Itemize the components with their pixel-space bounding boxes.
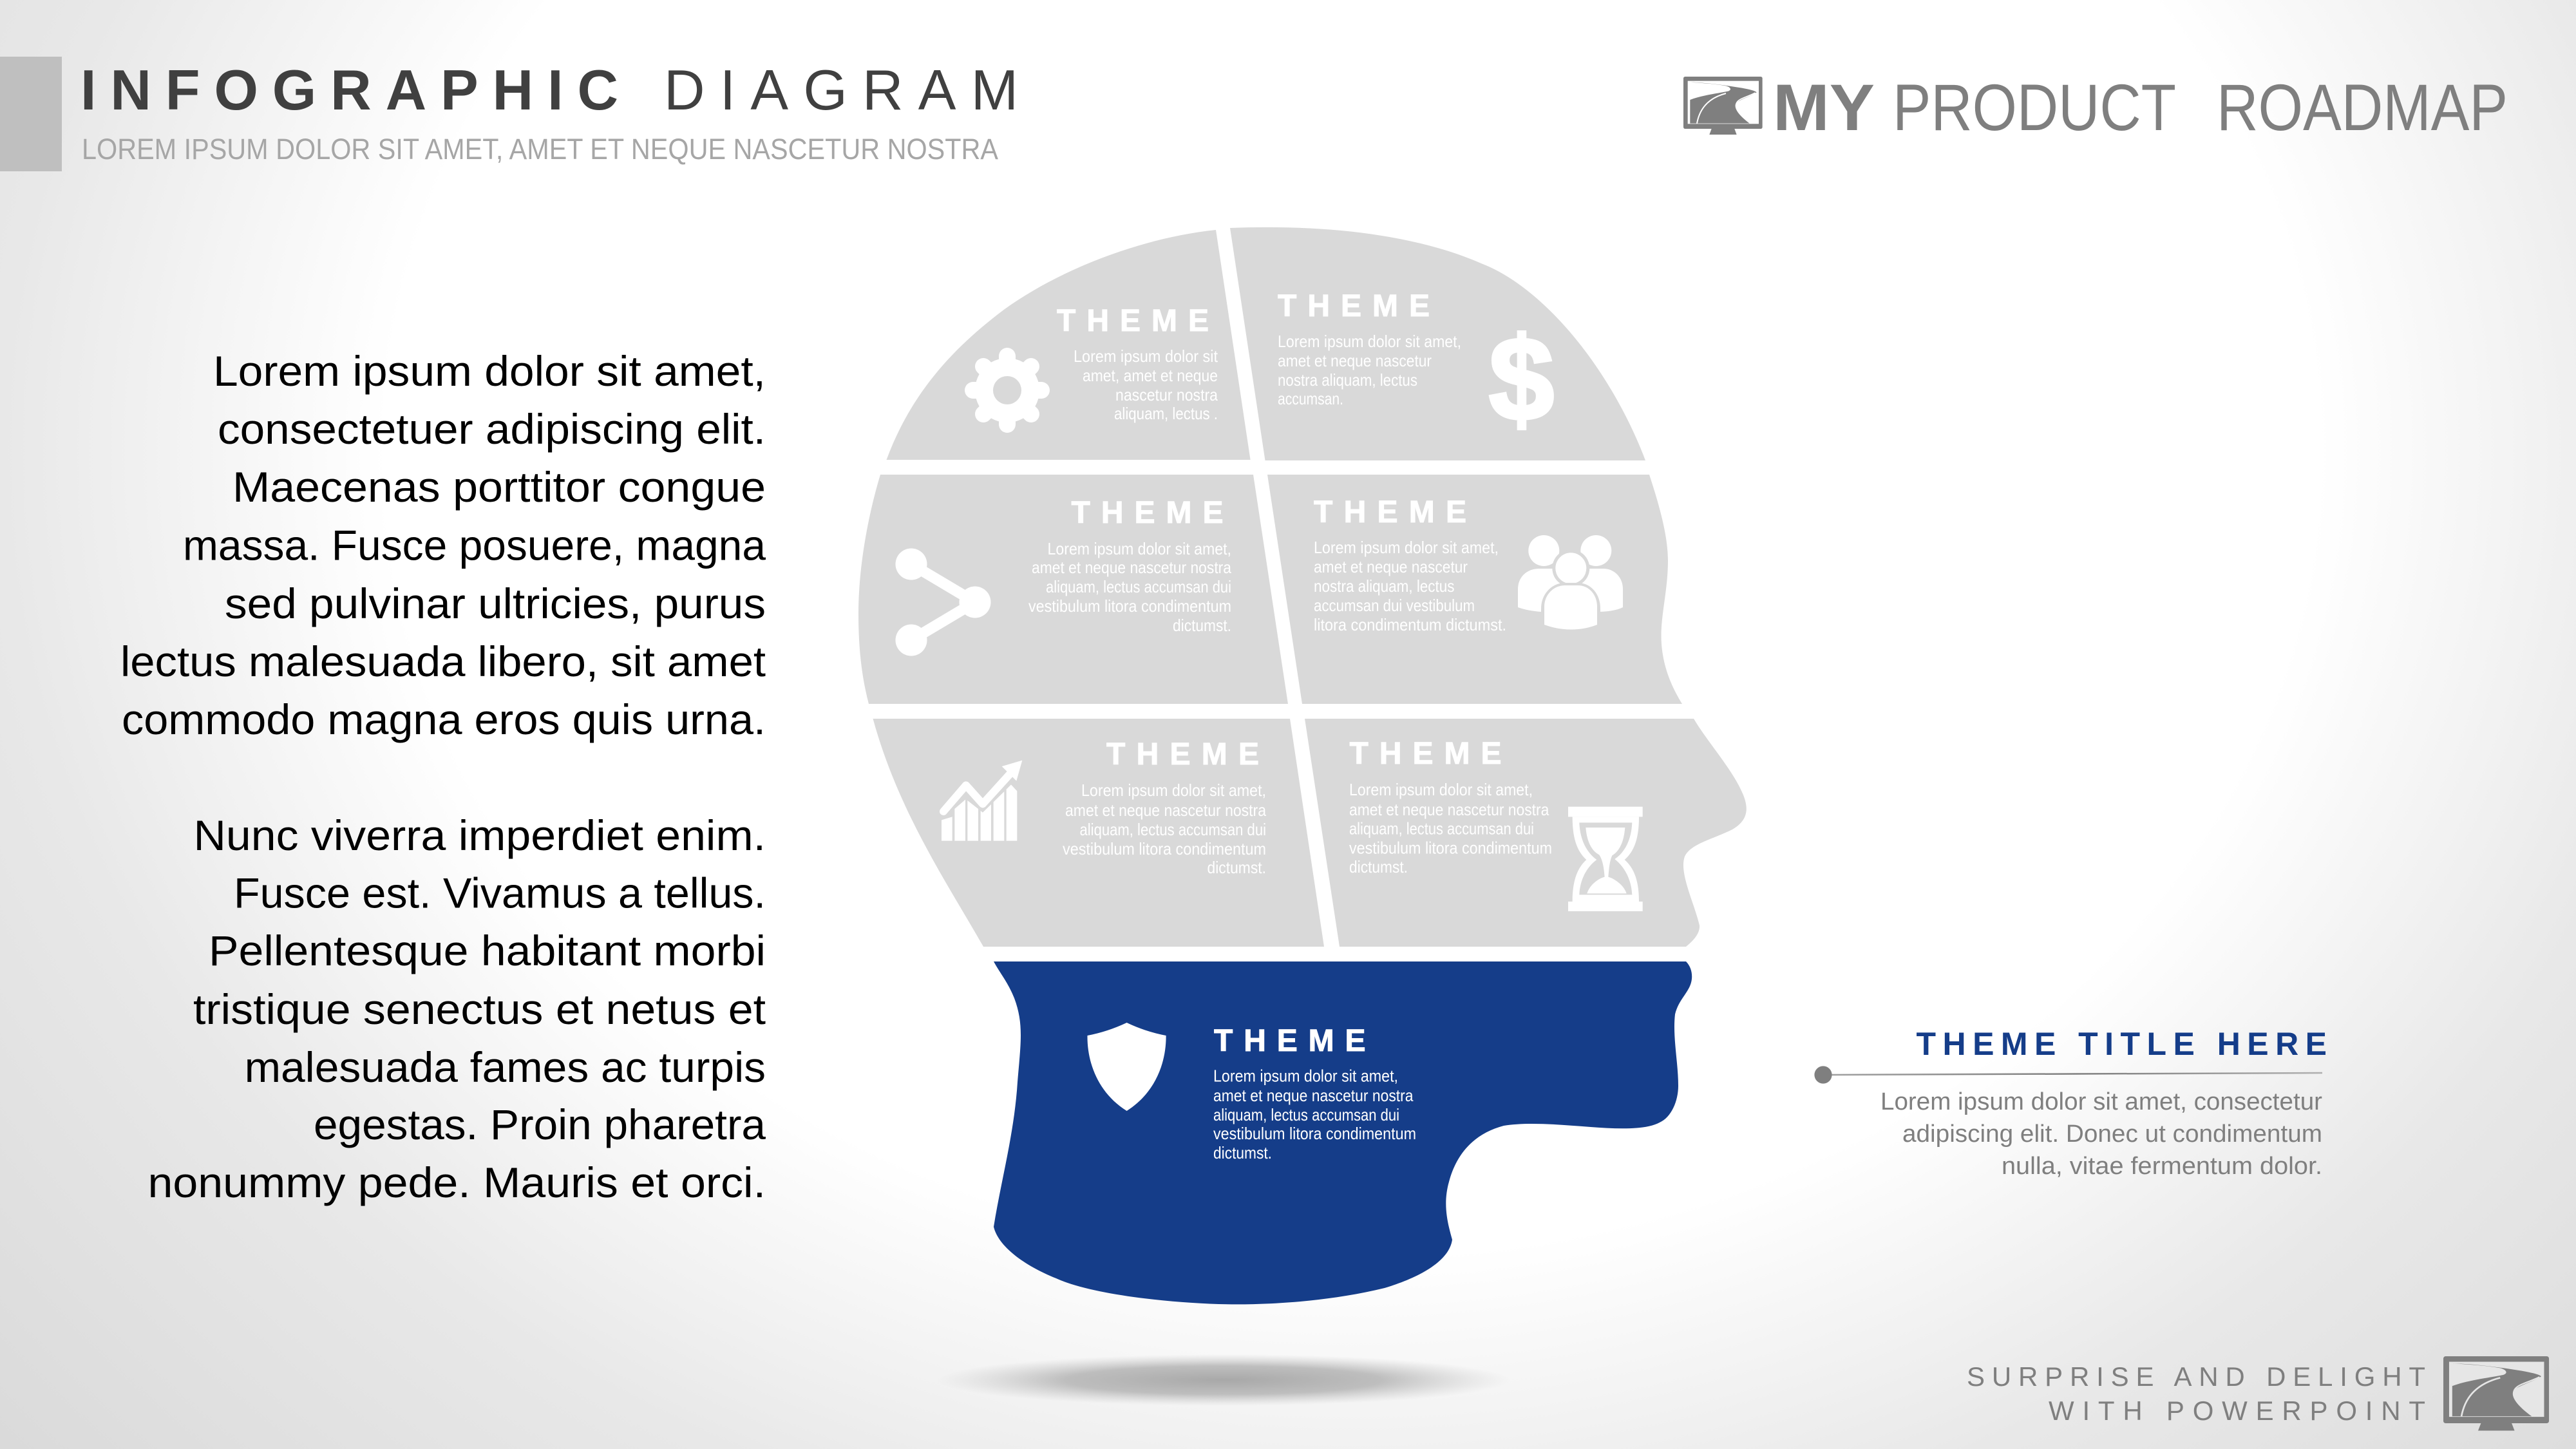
panel: lower right (hourglass) — [1305, 719, 1747, 947]
footer tagline: WITH POWERPOINT — [2049, 1396, 2425, 1426]
paragraph two: malesuada fames ac turpis — [245, 1043, 766, 1091]
title: DIAGRAM — [664, 58, 1018, 122]
text block: vestibulum litora condimentum — [1213, 1124, 1416, 1143]
text block: aliquam, lectus accumsan dui — [1079, 820, 1266, 839]
paragraph one: sed pulvinar ultricies, purus — [225, 580, 766, 627]
callout body: Lorem ipsum dolor sit amet, consectetur — [1880, 1088, 2322, 1115]
heading: THEME — [1072, 496, 1224, 530]
text block — [1278, 332, 1461, 408]
head diagram — [858, 227, 1747, 1304]
text block: accumsan. — [1278, 389, 1343, 408]
title — [80, 58, 1018, 122]
callout leader line — [1814, 1066, 2322, 1084]
text block: aliquam, lectus . — [1114, 404, 1218, 423]
text block: Lorem ipsum dolor sit amet, — [1081, 781, 1266, 800]
text block: vestibulum litora condimentum — [1063, 839, 1266, 858]
logo: header brand — [1683, 71, 2508, 144]
text block: Lorem ipsum dolor sit amet, — [1047, 539, 1231, 558]
panel: chin (highlighted theme) — [994, 961, 1692, 1304]
body copy: left column — [120, 347, 766, 1206]
text block: amet et neque nascetur nostra — [1213, 1086, 1414, 1105]
text block: accumsan dui vestibulum — [1314, 596, 1475, 615]
paragraph one: Lorem ipsum dolor sit amet, — [213, 347, 766, 395]
icon: gear — [973, 356, 1041, 424]
heading: THEME — [1278, 289, 1430, 323]
subtitle: LOREM IPSUM DOLOR SIT AMET, AMET ET NEQUE NASCETUR NOSTRA — [82, 133, 998, 166]
panel: middle right (people) — [1267, 475, 1682, 704]
callout heading: THEME TITLE HERE — [1917, 1026, 2327, 1062]
text block — [1074, 346, 1218, 423]
heading: THEME — [1214, 1024, 1365, 1058]
text block: Lorem ipsum dolor sit amet, — [1278, 332, 1461, 351]
panel: middle left (share) — [858, 475, 1288, 704]
text block: Lorem ipsum dolor sit amet, — [1213, 1066, 1398, 1086]
text block — [1028, 539, 1231, 635]
text block: Lorem ipsum dolor sit amet, — [1314, 538, 1499, 557]
paragraph one: lectus malesuada libero, sit amet — [120, 638, 766, 685]
text block: nostra aliquam, lectus — [1278, 370, 1417, 390]
text block: amet et neque nascetur — [1314, 557, 1468, 576]
text block: litora condimentum dictumst. — [1314, 615, 1506, 634]
floor shadow under head — [937, 1354, 1510, 1406]
text block: dictumst. — [1173, 616, 1231, 635]
text block: aliquam, lectus accumsan dui — [1046, 577, 1231, 596]
panel: top left (gear) — [886, 230, 1251, 460]
paragraph one — [120, 347, 766, 743]
text block — [1349, 780, 1552, 876]
text block: aliquam, lectus accumsan dui — [1349, 819, 1534, 838]
text block: Lorem ipsum dolor sit amet, — [1349, 780, 1533, 799]
text block: amet et neque nascetur nostra — [1065, 800, 1266, 820]
paragraph one: massa. Fusce posuere, magna — [183, 522, 766, 569]
callout body: adipiscing elit. Donec ut condimentum — [1902, 1121, 2322, 1148]
icon: monitor with road — [1683, 77, 1763, 135]
text block: nascetur nostra — [1115, 385, 1218, 404]
callout body — [1880, 1088, 2322, 1180]
text block — [1063, 781, 1266, 877]
heading: THEME — [1106, 737, 1259, 772]
paragraph two: nonummy pede. Mauris et orci. — [148, 1159, 766, 1206]
panel: lower left (growth chart) — [873, 719, 1324, 947]
text block: vestibulum litora condimentum — [1349, 838, 1552, 858]
icon: shield — [1087, 1023, 1166, 1111]
callout body: nulla, vitae fermentum dolor. — [2002, 1153, 2322, 1180]
text block: vestibulum litora condimentum — [1028, 596, 1231, 616]
icon: share — [895, 549, 990, 656]
footer branding — [1967, 1356, 2549, 1431]
paragraph two: egestas. Proin pharetra — [314, 1101, 766, 1148]
paragraph two: Fusce est. Vivamus a tellus. — [234, 869, 766, 917]
brand name: MY — [1773, 71, 1875, 144]
heading: THEME — [1350, 737, 1502, 771]
text block: amet et neque nascetur — [1278, 351, 1432, 370]
icon: growth chart — [942, 761, 1022, 841]
text block: dictumst. — [1349, 857, 1408, 876]
icon: hourglass — [1568, 807, 1643, 911]
text block: nostra aliquam, lectus — [1314, 576, 1454, 596]
footer tagline: SURPRISE AND DELIGHT — [1967, 1361, 2425, 1392]
brand name: PRODUCT — [1893, 71, 2176, 144]
text block — [1314, 538, 1506, 634]
text block: amet et neque nascetur nostra — [1349, 800, 1549, 819]
icon: footer monitor with road — [2443, 1356, 2549, 1431]
text block — [1213, 1066, 1416, 1162]
heading: THEME — [1314, 495, 1466, 529]
paragraph two: Nunc viverra imperdiet enim. — [193, 811, 766, 859]
text block: aliquam, lectus accumsan dui — [1213, 1105, 1399, 1124]
heading: THEME — [1057, 304, 1209, 338]
paragraph two: tristique senectus et netus et — [193, 985, 766, 1033]
header accent bar — [0, 57, 62, 171]
paragraph one: Maecenas porttitor congue — [232, 463, 766, 511]
text block: amet, amet et neque — [1083, 366, 1218, 385]
icon: dollar sign: $ — [1489, 312, 1554, 445]
panel: top right (dollar) — [1230, 227, 1645, 460]
brand name — [1773, 71, 2508, 144]
paragraph two — [148, 811, 766, 1206]
text block: dictumst. — [1207, 858, 1266, 877]
text block: Lorem ipsum dolor sit — [1074, 346, 1218, 366]
text block: amet et neque nascetur nostra — [1032, 558, 1231, 577]
paragraph two: Pellentesque habitant morbi — [209, 927, 766, 974]
text block: dictumst. — [1213, 1143, 1272, 1162]
title: INFOGRAPHIC — [80, 58, 618, 122]
brand name: ROADMAP — [2217, 71, 2508, 144]
paragraph one: consectetuer adipiscing elit. — [218, 405, 766, 453]
callout: theme title — [1814, 1026, 2327, 1180]
icon: people — [1518, 535, 1623, 632]
paragraph one: commodo magna eros quis urna. — [122, 696, 766, 743]
footer tagline — [1967, 1361, 2425, 1426]
